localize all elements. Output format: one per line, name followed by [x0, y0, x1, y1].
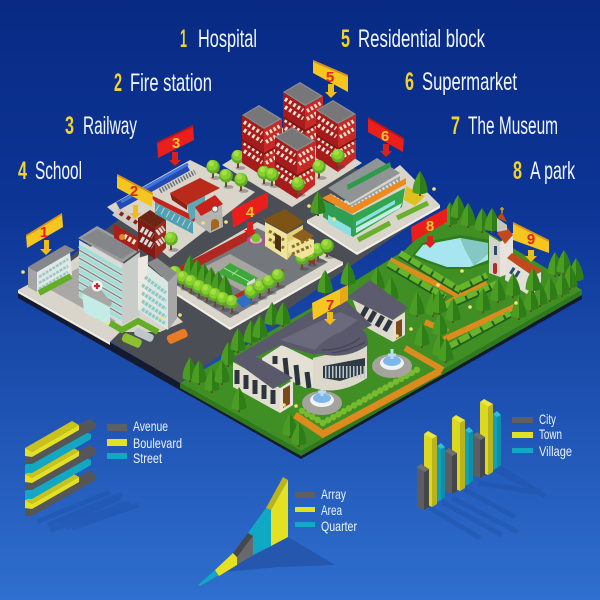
- label 6 supermarket: 6: [405, 68, 414, 96]
- bars: [25, 419, 96, 516]
- residential front trees: [257, 149, 346, 197]
- label 6 supermarket: [405, 68, 517, 96]
- soccer block: [157, 209, 343, 330]
- label 1 hospital: Hospital: [198, 25, 257, 53]
- marker 2: 2: [130, 183, 138, 200]
- church: [489, 207, 542, 298]
- marker 8: 8: [426, 218, 434, 235]
- chart: array area quarter: [198, 477, 357, 586]
- railway train: [118, 164, 195, 206]
- hedge: [39, 276, 71, 293]
- chart shadows: [430, 468, 545, 538]
- legend: Village: [539, 443, 572, 459]
- label 5 residential block: Residential block: [358, 25, 485, 53]
- supermarket lot: [307, 165, 440, 252]
- label 1 hospital: [180, 25, 257, 53]
- label 2 fire station: [114, 69, 212, 97]
- label 8 a park: [513, 157, 575, 185]
- street lamps: [21, 187, 518, 408]
- marker 4: 4: [246, 204, 255, 221]
- title list: left labels: [18, 25, 257, 185]
- blue shelter: [236, 294, 253, 308]
- red wall: [177, 228, 256, 276]
- yellow school house: [263, 209, 314, 260]
- green park ground: [180, 210, 582, 451]
- legend: City: [539, 411, 556, 427]
- fire station: [112, 207, 166, 259]
- chart: avenue boulevard street: [25, 418, 182, 530]
- tree row: [168, 239, 334, 315]
- marker 7: 7: [326, 297, 334, 314]
- conifers behind row: [182, 255, 232, 300]
- label 4 school: [18, 157, 82, 185]
- park conifers front: [370, 250, 584, 363]
- marker 3: 3: [172, 135, 180, 152]
- front hedges: [110, 321, 158, 332]
- fountain right: [372, 349, 412, 378]
- label 3 railway: [65, 112, 137, 140]
- hospital: [28, 226, 189, 349]
- building front: [275, 127, 315, 199]
- legend: [107, 418, 182, 466]
- pond: [412, 235, 490, 269]
- hospital lot: [18, 240, 183, 342]
- marker 6: [368, 117, 404, 157]
- isometric city map: [18, 60, 584, 459]
- title list: right labels: [341, 25, 575, 185]
- marker 1: [26, 213, 63, 255]
- main tower: [78, 226, 140, 325]
- label 5 residential block: 5: [341, 25, 350, 53]
- block rim: [157, 222, 343, 327]
- marker 1: 1: [40, 224, 48, 241]
- building back: [283, 82, 323, 154]
- legend: [512, 411, 572, 459]
- chart: city town village: [417, 399, 572, 538]
- label 3 railway: Railway: [83, 112, 137, 140]
- label 2 fire station: Fire station: [130, 69, 212, 97]
- court surround: [202, 254, 272, 293]
- label 8 a park: 8: [513, 157, 522, 185]
- entrance: [80, 283, 112, 326]
- label 4 school: 4: [18, 157, 27, 185]
- platform side: [18, 290, 582, 459]
- marker 3: [157, 125, 194, 166]
- marker 2: [117, 174, 153, 219]
- marker 8: [411, 208, 447, 248]
- bars: [417, 399, 501, 510]
- main hall: [233, 300, 372, 388]
- rear wing: [347, 280, 408, 342]
- marker 9: 9: [527, 231, 535, 248]
- label 2 fire station: 2: [114, 69, 122, 97]
- museum trees back: [220, 262, 356, 367]
- museum: [232, 280, 408, 413]
- building right: [316, 100, 356, 172]
- label 3 railway: 3: [65, 112, 74, 140]
- museum garden: [295, 349, 440, 434]
- nave: [505, 258, 541, 298]
- label 1 hospital: 1: [180, 25, 187, 53]
- marker 5: 5: [326, 69, 334, 86]
- cars: [121, 327, 189, 349]
- station building: [150, 178, 223, 234]
- legend: Street: [133, 450, 162, 466]
- fence right: [290, 240, 315, 265]
- park conifers back: [442, 195, 500, 233]
- marker 5: [313, 60, 348, 98]
- supermarket: [310, 158, 428, 240]
- chart shadow: [223, 537, 335, 572]
- map markers: [26, 60, 549, 325]
- label 8 a park: A park: [530, 157, 575, 185]
- rotunda: [313, 329, 368, 390]
- chart shadows: [37, 492, 138, 530]
- asphalt roads: [40, 150, 440, 383]
- residential lot: [222, 120, 362, 207]
- soccer field: [217, 263, 258, 287]
- legend: Quarter: [321, 518, 357, 534]
- right wing: [138, 255, 177, 330]
- museum front trees: [182, 357, 306, 447]
- medical sign: [92, 280, 102, 292]
- marker 7: [312, 285, 348, 325]
- left wing: [28, 245, 75, 293]
- label 6 supermarket: Supermarket: [422, 68, 517, 96]
- church tower: [489, 235, 500, 277]
- station and residential trees: [164, 150, 248, 252]
- wedge: [198, 477, 288, 586]
- garden path: [295, 371, 440, 434]
- legend: Array: [321, 486, 346, 502]
- front wing: [232, 353, 293, 413]
- legend: Town: [539, 426, 562, 442]
- legend: Area: [321, 502, 342, 518]
- legend: Boulevard: [133, 435, 182, 451]
- legend: [295, 486, 357, 534]
- label 7 the museum: 7: [451, 112, 460, 140]
- red fence: [233, 269, 284, 300]
- station lot: [107, 160, 255, 258]
- park hedges: [388, 253, 510, 349]
- label 4 school: School: [35, 157, 82, 185]
- park paths: [390, 260, 523, 370]
- label 5 residential block: [341, 25, 485, 53]
- label 7 the museum: [451, 112, 558, 140]
- fountain left: [302, 386, 342, 415]
- bead hedge: [302, 367, 422, 423]
- marker 9: [513, 222, 549, 262]
- building left: [242, 105, 282, 177]
- marker 4: [232, 192, 268, 236]
- block plaza: [168, 228, 328, 318]
- legend: Avenue: [133, 418, 168, 434]
- marker 6: 6: [381, 128, 389, 145]
- residential blocks: [242, 82, 356, 199]
- planter: [247, 234, 265, 245]
